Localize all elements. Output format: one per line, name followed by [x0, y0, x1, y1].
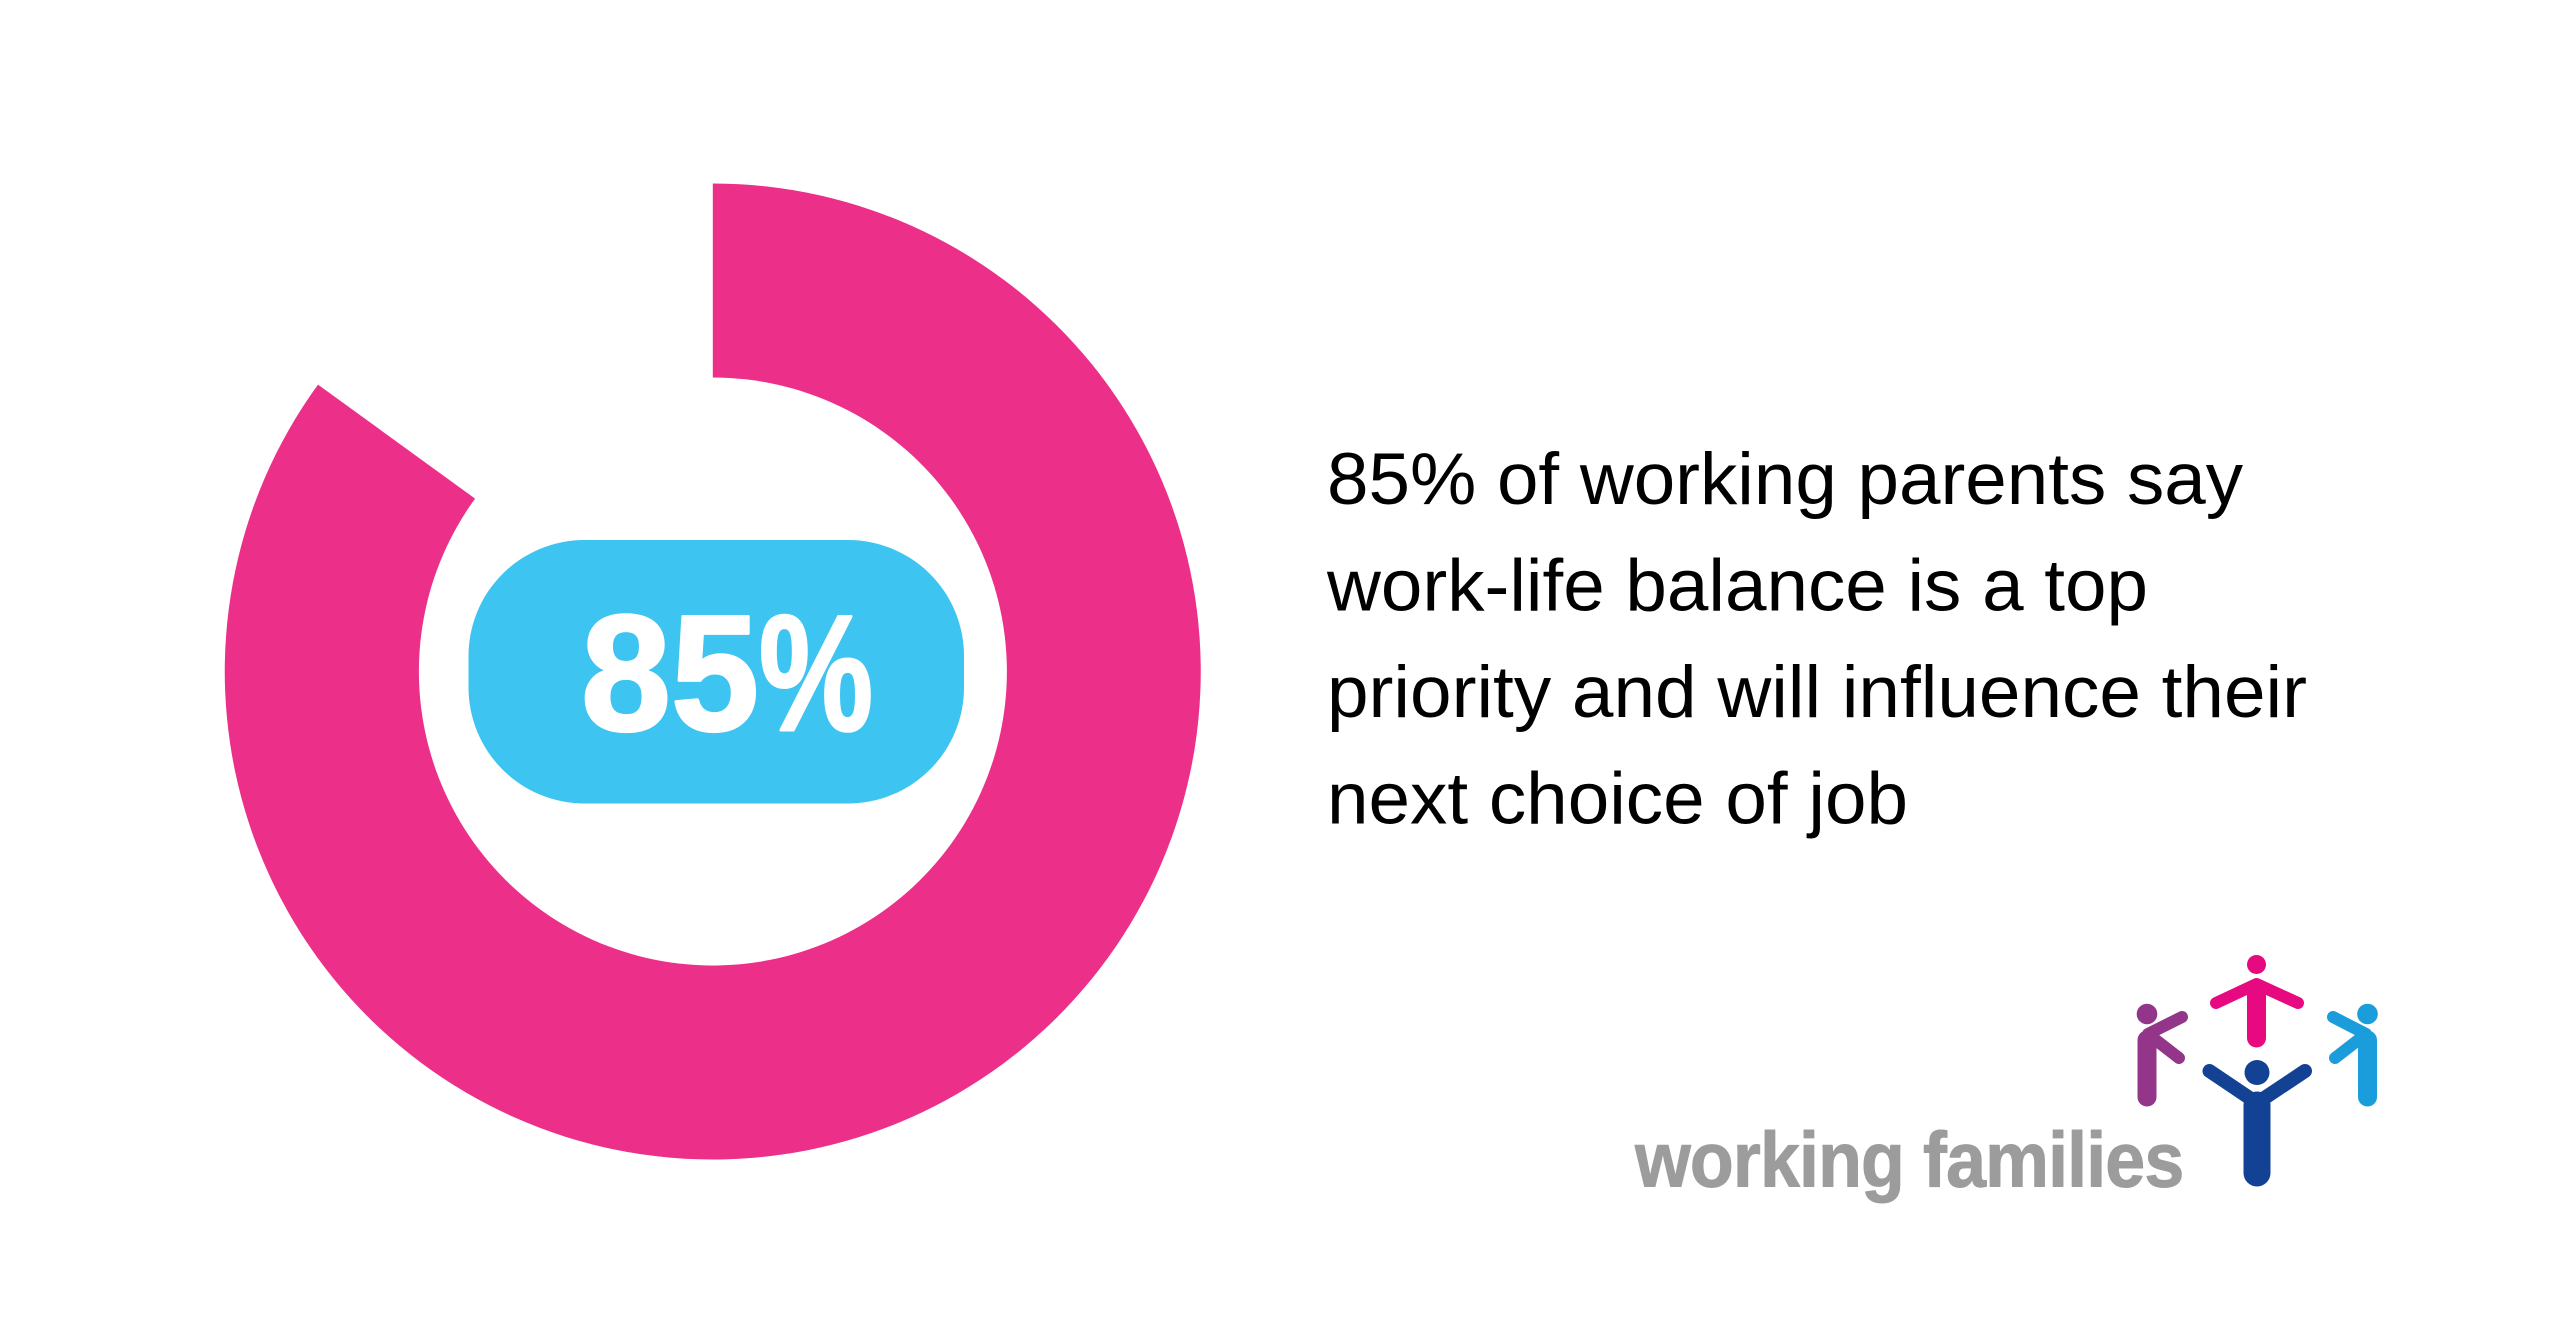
statement text: priority and will influence their	[1327, 652, 2307, 733]
logo figure: light blue	[2333, 1004, 2378, 1097]
donut chart: 85% ring	[225, 184, 1201, 1160]
centre badge: 85%: 5	[671, 581, 759, 765]
logo wordmark: working families	[1634, 1116, 2184, 1203]
logo: working families	[1634, 955, 2378, 1203]
statement text	[1326, 439, 2307, 840]
logo figure: navy	[2210, 1060, 2305, 1173]
centre badge: 85%: 8	[581, 581, 671, 765]
statement text: next choice of job	[1327, 758, 1908, 840]
logo figure: purple	[2137, 1004, 2182, 1097]
centre badge: 85%: %	[759, 581, 873, 765]
statement text: 85% of working parents say	[1327, 439, 2244, 520]
statement text: work-life balance is a top	[1326, 546, 2148, 626]
centre badge: 85%	[468, 540, 964, 804]
logo figure: pink	[2216, 955, 2298, 1038]
